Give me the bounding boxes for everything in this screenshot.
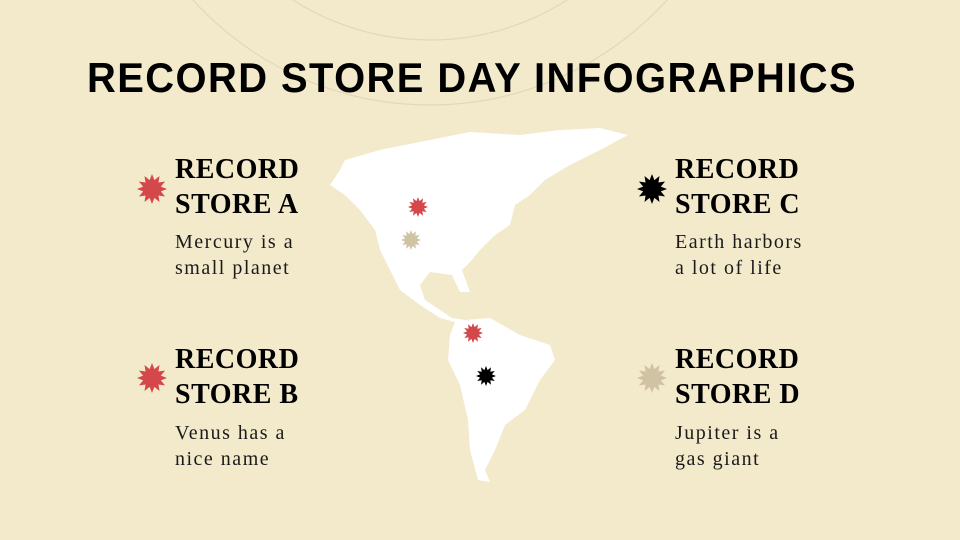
icon: star A [137,174,167,204]
title: RECORD STORE DAY INFOGRAPHICS [87,54,857,101]
text B: nice name [175,448,270,470]
heading C: STORE C [675,189,800,220]
heading D [675,344,800,410]
text C: a lot of life [675,257,783,279]
heading A [175,154,299,220]
heading C: RECORD [675,154,799,185]
heading D: RECORD [675,344,799,375]
text D: gas giant [675,448,760,470]
text C: Earth harbors [675,231,803,253]
icon: star B [137,363,167,393]
heading B: STORE B [175,379,299,410]
icon: star C [637,174,667,204]
heading D: STORE D [675,379,800,410]
text A [175,231,294,279]
text B [175,422,286,470]
text D [675,422,780,470]
icon: star D [638,364,666,392]
heading C [675,154,800,220]
heading A: STORE A [175,189,299,220]
text C [675,231,803,279]
text A: Mercury is a [175,231,294,253]
text A: small planet [175,257,290,279]
heading B: RECORD [175,344,299,375]
heading B [175,344,299,410]
heading A: RECORD [175,154,299,185]
text D: Jupiter is a [675,422,780,444]
map markers [401,197,496,386]
text B: Venus has a [175,422,286,444]
